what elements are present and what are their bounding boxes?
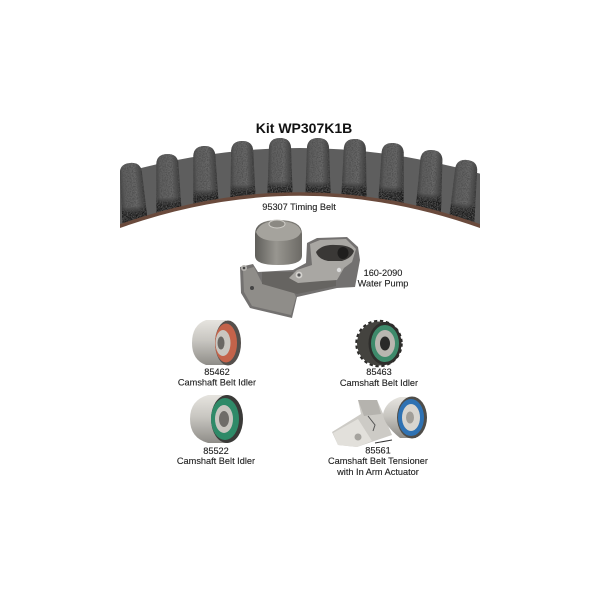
pump shaft cap: [269, 220, 285, 228]
timing belt: [120, 138, 480, 228]
label: 85561: [328, 446, 428, 477]
red seal face: [215, 320, 241, 366]
label: water pump: Water Pump: [358, 278, 408, 288]
pump housing: [240, 237, 360, 318]
pump cylinder: [255, 220, 302, 265]
idler 85463: [357, 322, 402, 366]
label: 85462: 85462: [204, 367, 230, 377]
pump bolt holes: [296, 272, 302, 278]
label: 85561: Camshaft Belt Tensioner: [328, 456, 428, 466]
label: water pump: 160-2090: [364, 268, 402, 278]
label: 85522: [177, 446, 255, 466]
label: timing belt: 95307 Timing Belt: [262, 202, 336, 212]
label: 85522: Camshaft Belt Idler: [177, 456, 255, 466]
green seal face: [371, 325, 399, 362]
pump outlet opening: [316, 245, 354, 261]
roller body: [192, 320, 226, 365]
belt teeth: [120, 138, 478, 224]
roller body: [190, 395, 228, 443]
gear teeth: [357, 322, 401, 366]
pump flange: [289, 239, 356, 283]
belt band: [120, 148, 480, 224]
label: 85463: Camshaft Belt Idler: [340, 378, 418, 388]
water pump: [240, 220, 360, 318]
pulley body: [383, 397, 416, 438]
label: 85561: 85561: [365, 446, 391, 456]
belt backing stripe: [112, 194, 488, 229]
title: Kit WP307K1B: [256, 120, 352, 136]
blue seal face: [397, 396, 427, 438]
tensioner arm: [332, 400, 392, 447]
label: 85462: Camshaft Belt Idler: [178, 378, 256, 388]
tensioner 85561: [332, 396, 427, 447]
label: water pump: [358, 268, 408, 288]
label: 85463: [340, 367, 418, 388]
white area below belt: [120, 196, 480, 234]
label: 85462: [178, 367, 256, 388]
idler 85462: [192, 320, 241, 366]
label: 85463: 85463: [366, 367, 392, 377]
idler 85522: [190, 395, 243, 443]
label: 85522: 85522: [203, 446, 229, 456]
green seal face: [211, 395, 243, 443]
label: 85561: with In Arm Actuator: [336, 467, 419, 477]
gear outer rim: [368, 322, 402, 365]
